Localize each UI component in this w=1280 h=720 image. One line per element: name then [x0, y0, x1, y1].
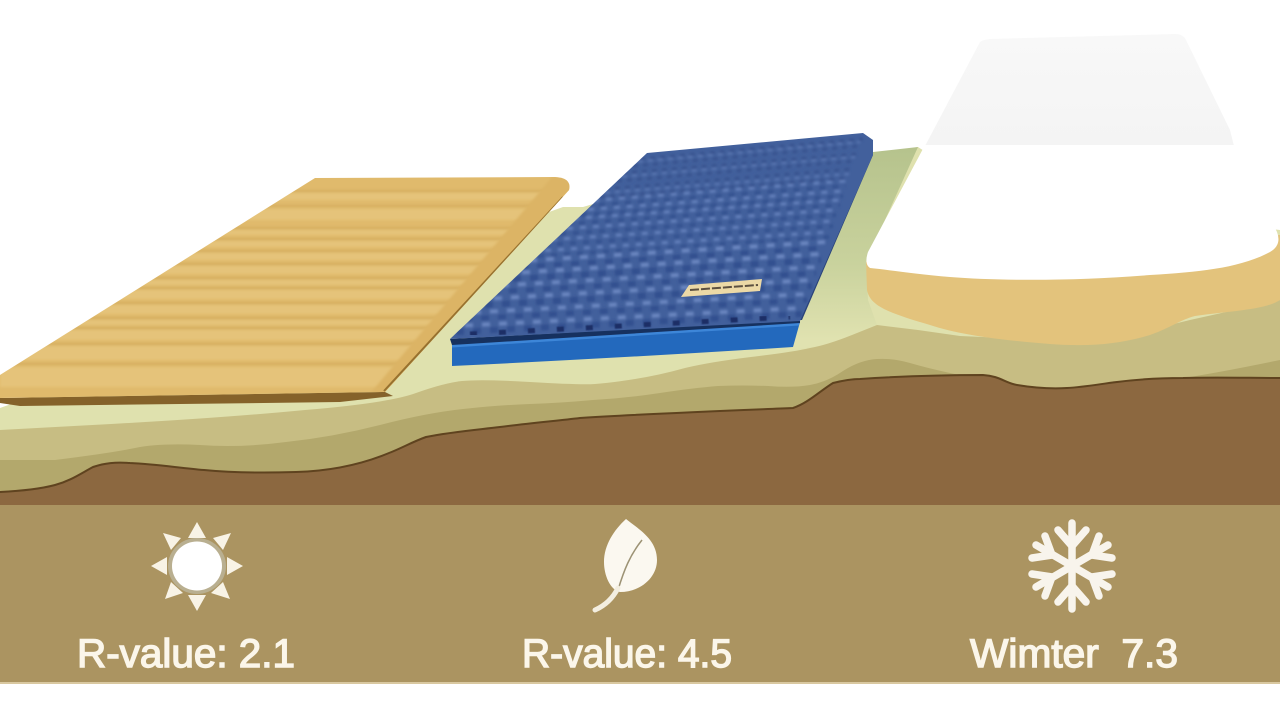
icon: leaf — [595, 519, 657, 610]
pad underside — [0, 392, 393, 406]
white winter mattress — [866, 34, 1280, 345]
foam base — [452, 322, 800, 366]
tan foam base — [866, 235, 1280, 345]
dark dimples along front edge — [470, 317, 790, 334]
mattress top upper — [925, 34, 1234, 146]
dimpled top — [450, 133, 873, 339]
mid sediment layer — [0, 300, 1280, 505]
logo tag — [681, 279, 762, 297]
icon: sun — [151, 522, 243, 611]
label: R-value 4.5: R-value: 4.5 — [522, 632, 732, 676]
blue three-season pad — [450, 133, 873, 366]
terrain cross-section — [0, 147, 1280, 512]
pad side bevel — [368, 177, 575, 396]
pad edge line — [384, 197, 563, 391]
side edge — [796, 140, 873, 320]
mattress top lower — [866, 145, 1278, 280]
label: R-value 2.1: R-value: 2.1 — [77, 632, 295, 676]
info band — [0, 505, 1280, 684]
pad top — [0, 177, 569, 398]
dark sediment layer — [0, 359, 1280, 505]
yellow summer pad — [0, 177, 575, 406]
top surface — [0, 147, 1280, 505]
soil layer — [0, 375, 1280, 512]
icon: snowflake — [1032, 523, 1112, 609]
green shaded surface behind mattress — [785, 147, 918, 350]
pad ribs — [0, 177, 575, 396]
label: Winter 7.3: Wimter 7.3 — [970, 632, 1178, 676]
